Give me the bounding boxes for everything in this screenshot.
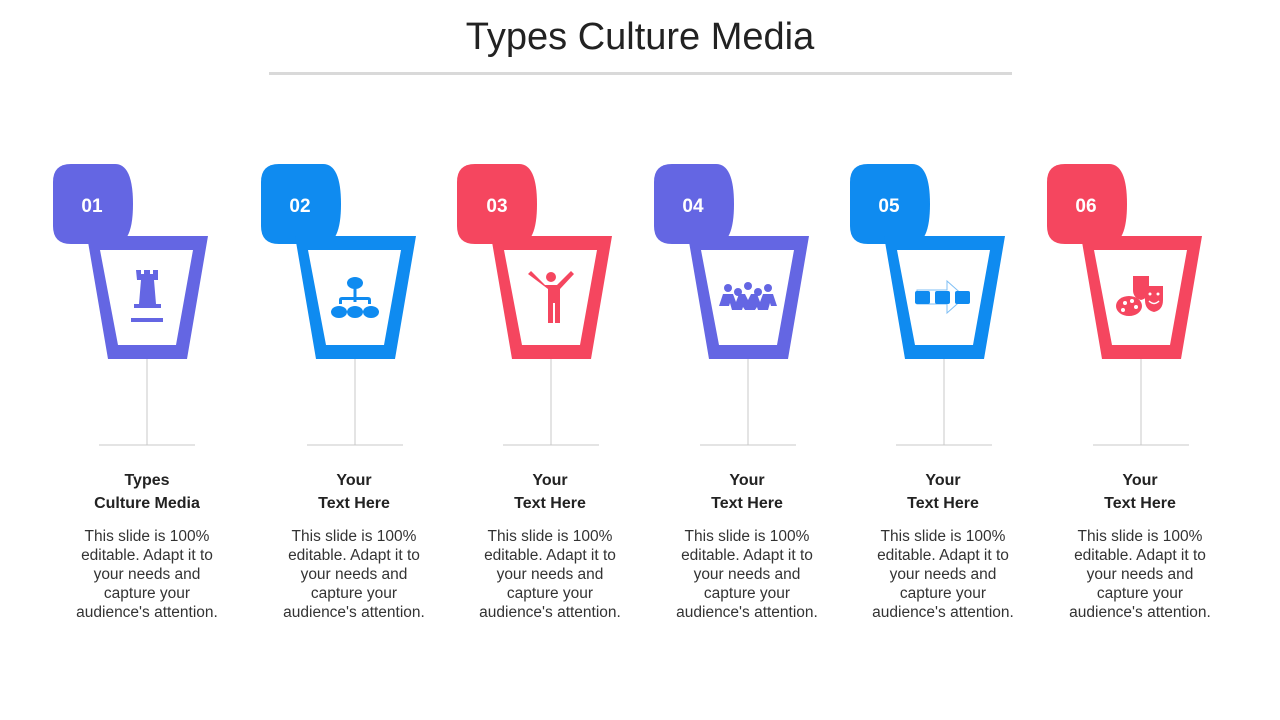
icon: rook <box>131 270 163 322</box>
card 03 <box>457 164 612 445</box>
icon: hierarchy <box>331 277 379 318</box>
card 05: 05 <box>878 196 900 217</box>
card 04: 04 <box>682 196 704 217</box>
card 04 <box>654 164 809 445</box>
caption 04: Text Here <box>711 495 783 512</box>
card 02 <box>261 164 416 445</box>
caption 05 <box>872 472 1014 621</box>
caption 01: Types <box>124 472 170 489</box>
card 06 <box>1047 164 1202 445</box>
caption 06 <box>1069 472 1211 621</box>
caption 04: Your <box>729 472 765 489</box>
caption 03: Text Here <box>514 495 586 512</box>
caption 06: Text Here <box>1104 495 1176 512</box>
caption 03: Your <box>532 472 568 489</box>
caption 03: This slide is 100% editable. Adapt it to your needs and capture your audience's attention. <box>479 528 621 621</box>
caption 05: Text Here <box>907 495 979 512</box>
caption 02 <box>283 472 425 621</box>
card 06: 06 <box>1075 196 1097 217</box>
caption 01: This slide is 100% editable. Adapt it to your needs and capture your audience's attention. <box>76 528 218 621</box>
caption 05: Your <box>925 472 961 489</box>
icon: person arms up <box>528 271 574 323</box>
caption 06: This slide is 100% editable. Adapt it to your needs and capture your audience's attention. <box>1069 528 1211 621</box>
card 03: 03 <box>486 196 508 217</box>
icon: group of people <box>719 282 777 310</box>
caption 01 <box>76 472 218 621</box>
card 02: 02 <box>289 196 311 217</box>
icon: masks and palette <box>1116 276 1163 316</box>
caption 01: Culture Media <box>94 495 200 512</box>
icon: process arrow <box>915 281 970 313</box>
caption 02: Your <box>336 472 372 489</box>
caption 06: Your <box>1122 472 1158 489</box>
caption 04: This slide is 100% editable. Adapt it to your needs and capture your audience's attention. <box>676 528 818 621</box>
title: Types Culture Media <box>466 16 814 58</box>
card 01: 01 <box>81 196 103 217</box>
caption 02: This slide is 100% editable. Adapt it to your needs and capture your audience's attention. <box>283 528 425 621</box>
caption 05: This slide is 100% editable. Adapt it to your needs and capture your audience's attention. <box>872 528 1014 621</box>
caption 04 <box>676 472 818 621</box>
caption 03 <box>479 472 621 621</box>
card 05 <box>850 164 1005 445</box>
caption 02: Text Here <box>318 495 390 512</box>
card 01 <box>53 164 208 445</box>
